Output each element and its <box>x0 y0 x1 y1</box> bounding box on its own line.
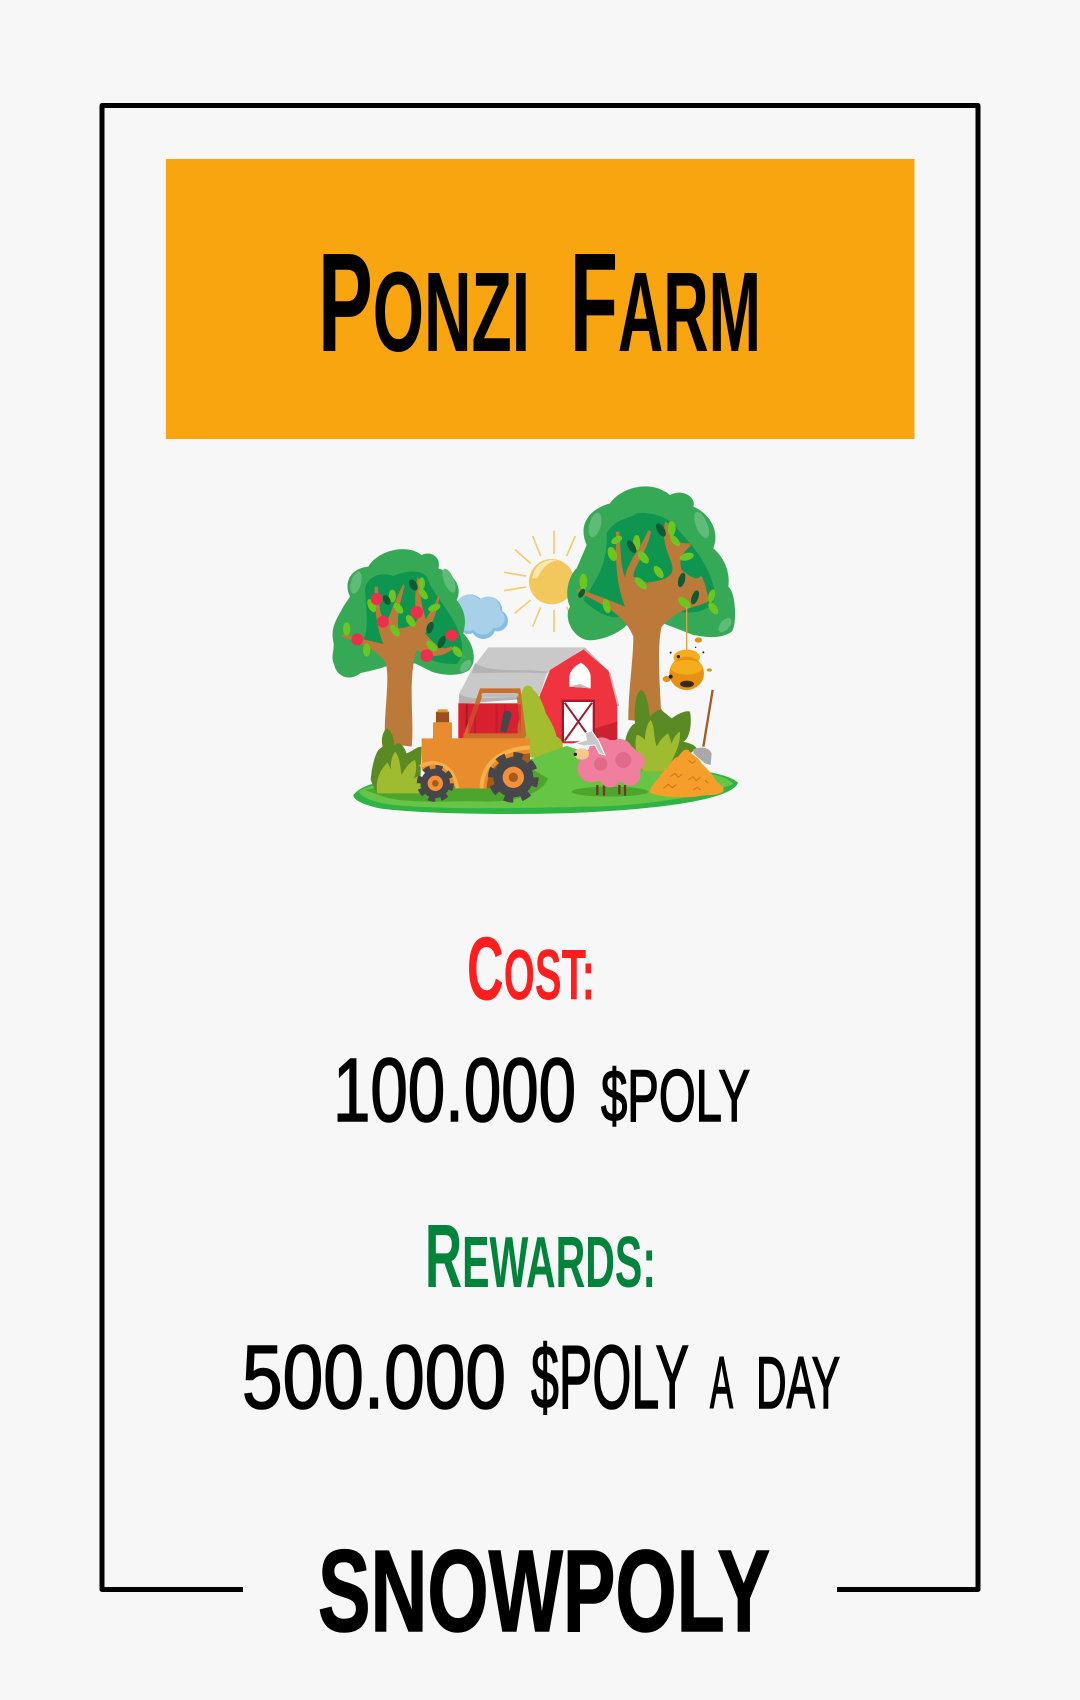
beehive with bees <box>663 607 712 690</box>
title banner <box>166 159 914 439</box>
rewards value: $POLY <box>531 1328 689 1428</box>
cost value: $POLY <box>601 1056 750 1137</box>
rewards value: DAY <box>756 1343 840 1424</box>
rewards value: 500.000 <box>242 1328 506 1428</box>
left tree with apples <box>333 549 474 747</box>
tractor front wheel <box>419 767 451 799</box>
cloud <box>455 594 508 639</box>
sheep <box>574 731 645 796</box>
hay pile <box>650 750 724 797</box>
right tree <box>567 486 735 723</box>
title: Ponzi Farm: PONZI <box>318 223 530 381</box>
rewards value: A <box>710 1343 733 1424</box>
tractor rear wheel <box>491 755 535 799</box>
cost label: COST: <box>467 920 595 1020</box>
title: Ponzi Farm: FARM <box>570 223 761 381</box>
cost value: 100.000 <box>333 1041 576 1141</box>
central bush <box>518 686 563 758</box>
brand wordmark: SNOWPOLY <box>318 1526 770 1656</box>
card frame <box>102 106 978 1590</box>
left bush <box>371 728 422 793</box>
tractor <box>419 691 535 799</box>
barn <box>458 647 619 743</box>
rewards value <box>242 1328 840 1428</box>
sun <box>504 531 575 632</box>
pitchfork <box>693 690 713 765</box>
illustration: farm scene <box>333 486 738 814</box>
ground <box>353 746 738 814</box>
right bush <box>625 690 697 772</box>
rewards label: REWARDS: <box>425 1207 656 1307</box>
